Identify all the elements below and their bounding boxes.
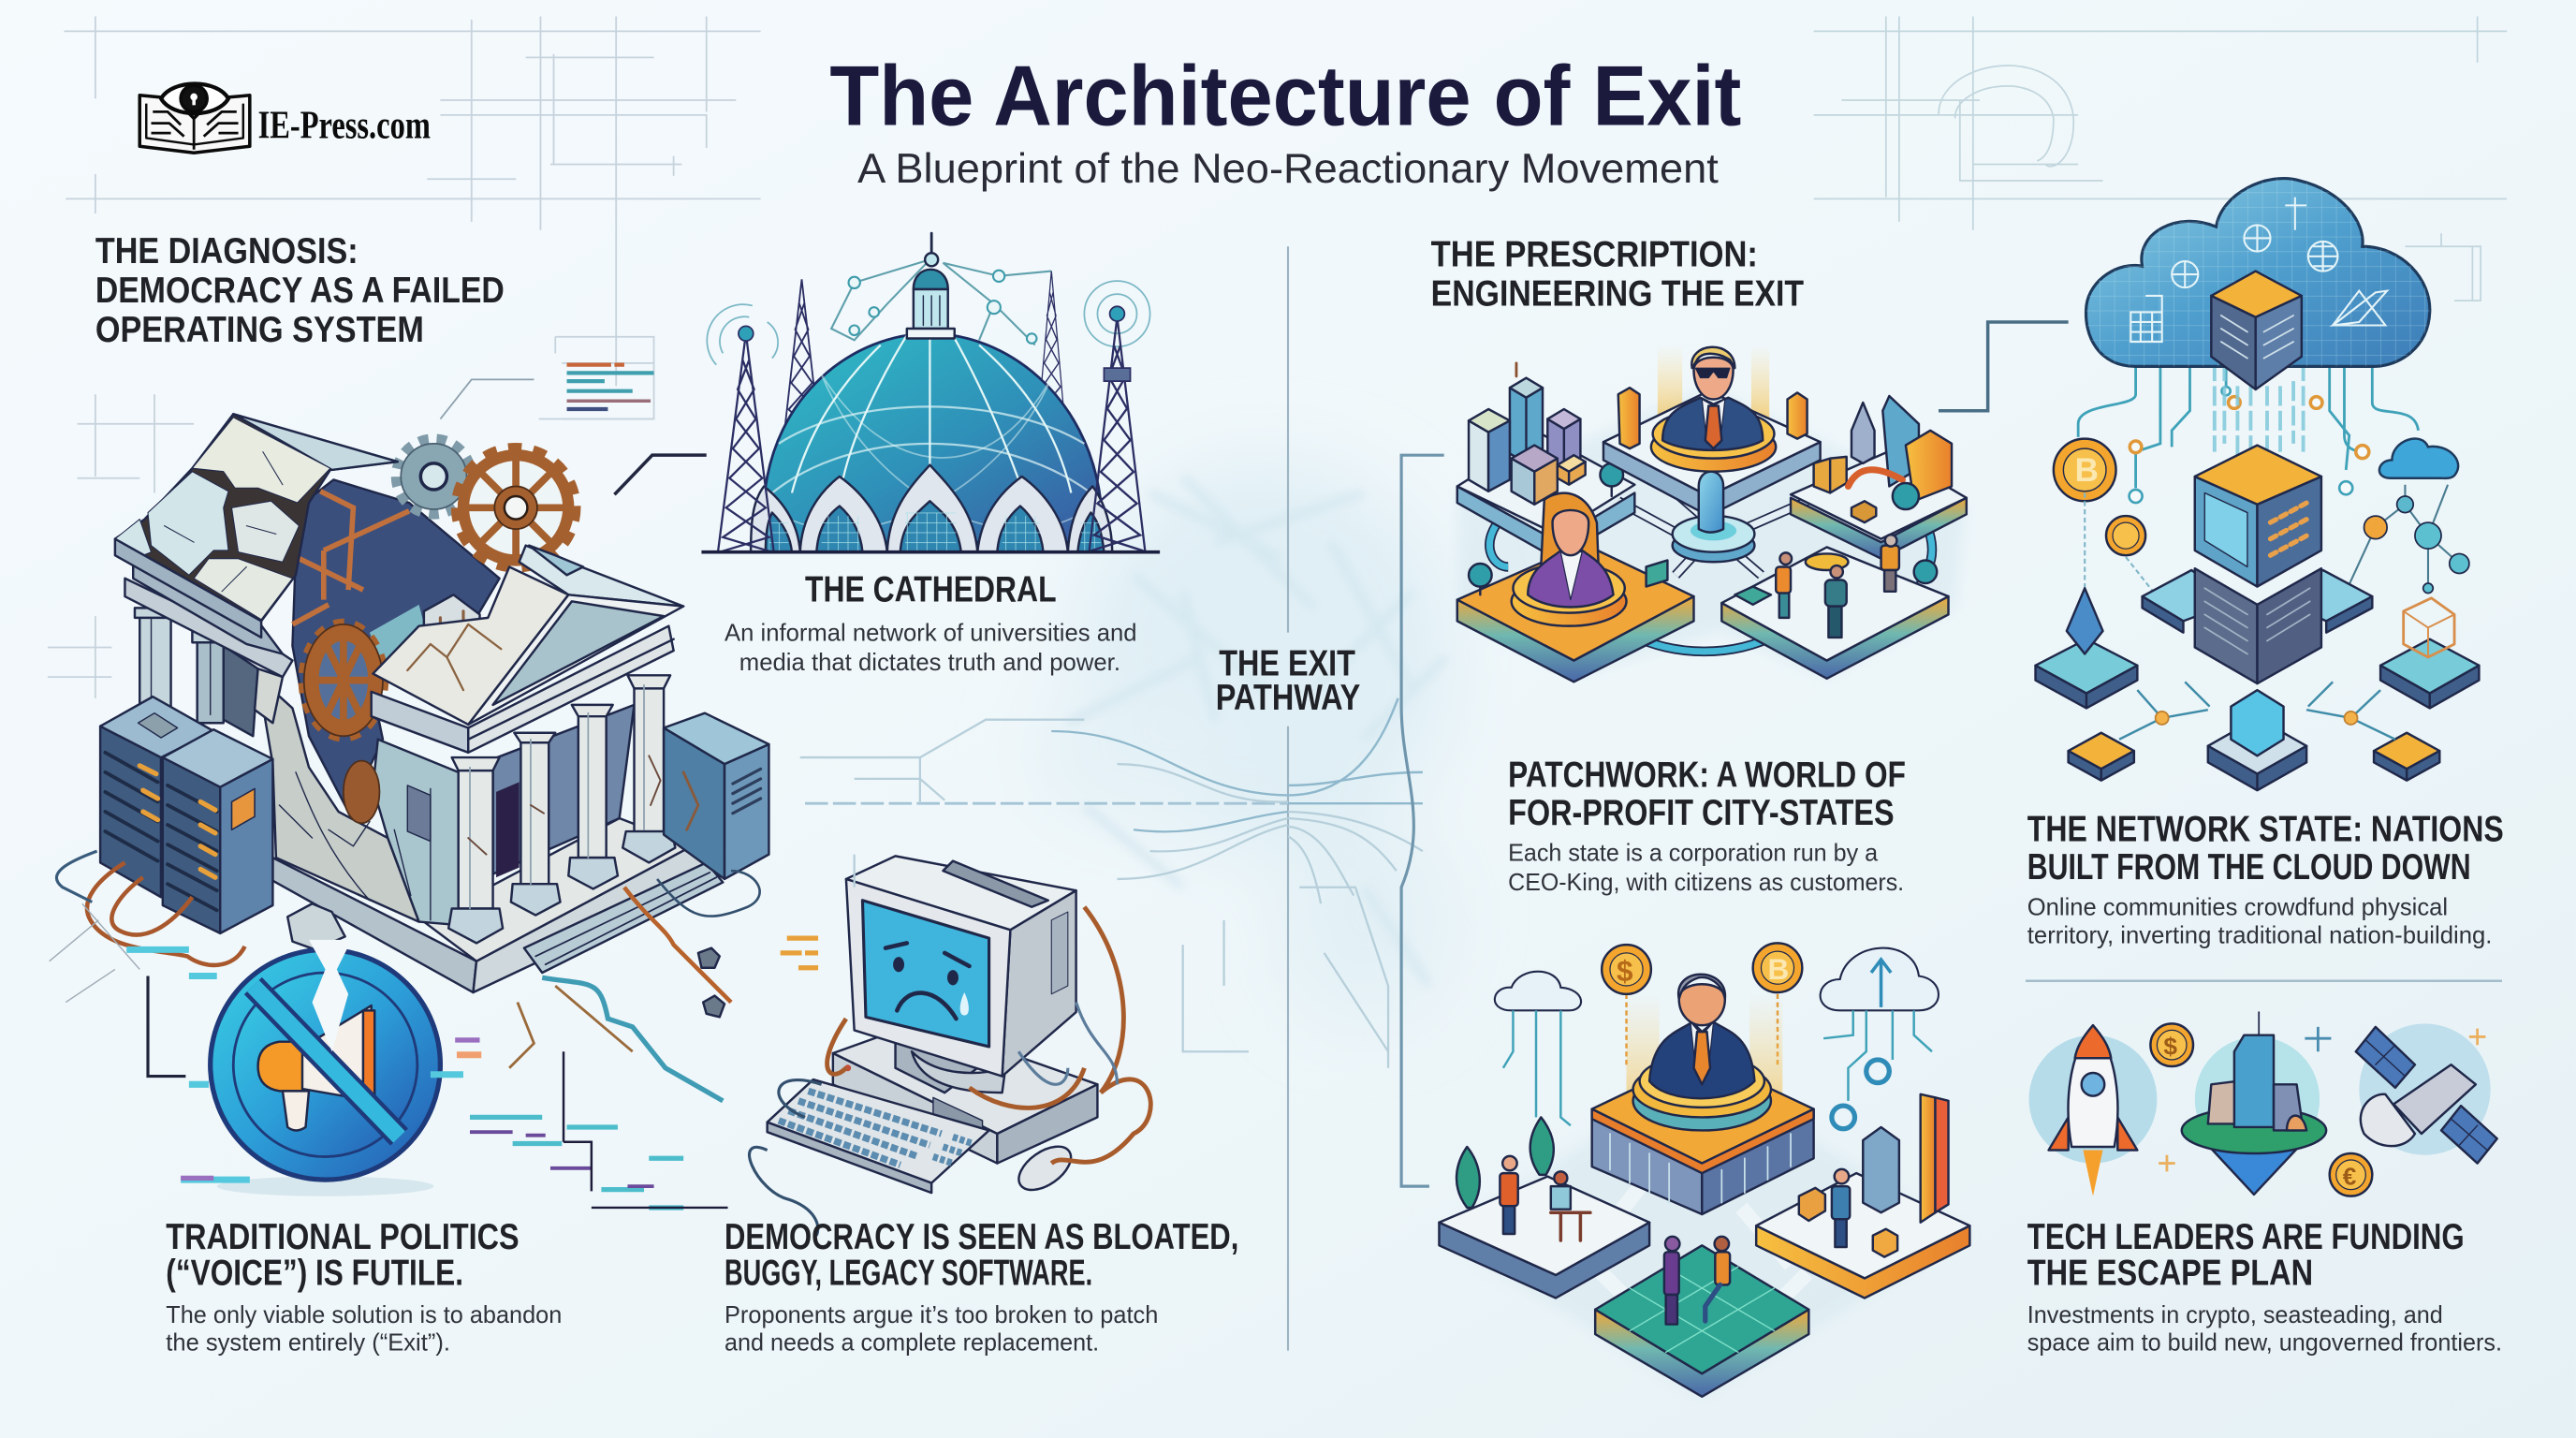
lower brown gears [304, 624, 383, 823]
centre spine [1287, 246, 1289, 1351]
illustration: patchwork city-states network [1457, 345, 1967, 682]
cables and debris [50, 851, 760, 1101]
mouse [1011, 1137, 1078, 1198]
icon row: escape plan: $ [2163, 1033, 2177, 1061]
heading: the prescription [1431, 234, 1804, 314]
small blueprint code panel [440, 363, 654, 419]
circuit traces [1503, 994, 1932, 1125]
heading: the diagnosis [95, 231, 505, 350]
blueprint lines: top right [1814, 17, 2507, 301]
tangled cables [750, 907, 1150, 1236]
citizens platform [1721, 535, 1949, 679]
monitor [846, 856, 1076, 1093]
subtitle: A Blueprint of the Neo-Reactionary Movement [857, 145, 1719, 192]
title: The Architecture of Exit [829, 48, 1741, 143]
icon: book and eye [139, 84, 250, 153]
grey gear [396, 439, 472, 514]
ethereum diamond and small platforms [2036, 588, 2479, 790]
icon row: escape plan [2029, 1012, 2497, 1196]
interior pipes [292, 492, 409, 624]
satellite icon [2356, 1023, 2497, 1164]
CEO figure [1662, 398, 1763, 450]
text: the network state: BUILT FROM THE CLOUD DOWN [2027, 847, 2471, 888]
text: tech leaders: THE ESCAPE PLAN [2027, 1253, 2313, 1293]
exit pathway label [1216, 643, 1360, 718]
female CEO platform [1457, 493, 1693, 682]
buildings [1510, 388, 1543, 463]
text: the cathedral: media that dictates truth and power. [739, 650, 1120, 676]
cracked side walls [224, 646, 459, 925]
right city platform [1791, 396, 1967, 559]
blueprint lines: top left [48, 17, 761, 698]
right platform [1756, 1094, 1969, 1298]
megaphone [258, 1005, 374, 1130]
heading: the prescription: ENGINEERING THE EXIT [1431, 273, 1804, 314]
illustration: network state cloud and tower: B [2075, 452, 2099, 489]
cyan links [1489, 516, 1932, 652]
text: traditional politics: the system entirely (“Exit”). [166, 1330, 450, 1357]
network over cathedral [831, 259, 1051, 345]
central building [1592, 975, 1814, 1214]
text: tech leaders: space aim to build new, ungoverned frontiers. [2027, 1330, 2502, 1357]
rocket icon [2029, 1025, 2157, 1196]
shadow [1457, 386, 1967, 677]
text: the network state [2027, 810, 2504, 948]
text: democracy is bloated: and needs a complete replacement. [724, 1330, 1099, 1357]
ground line [701, 551, 1160, 553]
glow beams [1627, 994, 1782, 1093]
text: patchwork: FOR-PROFIT CITY-STATES [1508, 793, 1895, 833]
executive figure [1649, 1022, 1754, 1098]
sparkles [2305, 1027, 2331, 1051]
connector: pathway to patchwork and cathedral side [1401, 455, 1444, 1186]
text: patchwork: Each state is a corporation run by a [1508, 841, 1879, 867]
bottom traces [2119, 682, 2395, 740]
gothic arches [751, 465, 1112, 552]
node graph [2346, 485, 2469, 594]
cloud glyphs [2130, 198, 2387, 342]
heading: the diagnosis: DEMOCRACY AS A FAILED [95, 271, 505, 311]
connector: temple to cathedral [614, 455, 707, 494]
keyboard [768, 1079, 989, 1193]
crack [309, 940, 352, 1051]
text: democracy is bloated: DEMOCRACY IS SEEN AS BLOATED, [724, 1217, 1238, 1257]
connecting bridges [1618, 493, 1808, 575]
top platform with CEO [1603, 345, 1821, 516]
exit pathway label: PATHWAY [1216, 678, 1360, 718]
side platforms [2143, 570, 2372, 633]
text: the network state: territory, inverting traditional nation-building. [2027, 922, 2492, 948]
text: democracy is bloated [724, 1217, 1238, 1357]
coins [1602, 943, 1802, 994]
left columns [135, 608, 283, 723]
shadow [1439, 1068, 1969, 1400]
text: democracy is bloated: Proponents argue it’s too broken to patch [724, 1302, 1158, 1328]
hub [1673, 472, 1754, 562]
left platform [1439, 1117, 1649, 1298]
signal rings [707, 281, 1150, 365]
dome [764, 333, 1101, 542]
mini cloud [2379, 439, 2458, 478]
computer case [833, 1022, 1097, 1164]
doorway [496, 782, 520, 877]
illustration: crumbling temple with servers [50, 414, 768, 1101]
prohibition slash [253, 986, 400, 1137]
exit pathway label: THE EXIT [1219, 643, 1355, 683]
logo [139, 84, 431, 153]
main tower [2195, 446, 2321, 683]
text: the cathedral: An informal network of universities and [724, 620, 1137, 646]
heading: the diagnosis: THE DIAGNOSIS: [95, 231, 359, 271]
server rack 2 [163, 729, 272, 933]
city island icon [2182, 1012, 2326, 1195]
sad face [886, 943, 970, 1019]
text: patchwork [1508, 756, 1906, 896]
left city platform [1457, 363, 1634, 559]
text: traditional politics: (“VOICE”) IS FUTILE. [166, 1253, 463, 1293]
illustration: corporate campus isometric: $ [1617, 954, 1633, 988]
text: the cathedral: THE CATHEDRAL [805, 569, 1057, 609]
text: democracy is bloated: BUGGY, LEGACY SOFTWARE. [724, 1253, 1092, 1293]
server rack right [664, 713, 768, 879]
illustration: network state cloud and tower [2036, 179, 2479, 790]
illustration: corporate campus isometric [1439, 943, 1969, 1400]
small clouds [1495, 972, 1581, 1010]
text: traditional politics [166, 1217, 562, 1357]
text: tech leaders [2027, 1217, 2502, 1357]
text: tech leaders: Investments in crypto, seasteading, and [2027, 1302, 2443, 1328]
illustration: sad legacy computer [750, 856, 1150, 1236]
decorative glitch dashes [126, 949, 728, 1208]
temple interior [292, 479, 500, 812]
connector: temple to banned voice [148, 976, 185, 1077]
broken left roof [115, 414, 398, 677]
heading: the diagnosis: OPERATING SYSTEM [95, 310, 424, 350]
illustration: cathedral dome with towers [701, 233, 1160, 552]
back towers [780, 279, 824, 476]
bottom platform [1595, 1237, 1808, 1397]
text: patchwork: PATCHWORK: A WORLD OF [1508, 756, 1906, 796]
dome ribs [772, 333, 1090, 529]
circuit traces [2078, 366, 2418, 488]
lantern [907, 233, 955, 339]
rear wall behind columns [493, 705, 634, 874]
temple base [272, 818, 731, 992]
text: the cathedral [724, 569, 1137, 676]
currency coins [2150, 1023, 2372, 1196]
exit pathway circuit lines [800, 698, 1423, 1068]
front columns [448, 675, 675, 943]
connector: patchwork to network state [1939, 322, 2069, 411]
icon: banned megaphone [211, 940, 440, 1196]
text: patchwork: CEO-King, with citizens as customers. [1508, 870, 1904, 896]
server rack 1 [100, 697, 213, 897]
coins [2054, 439, 2145, 555]
cloud [2086, 179, 2430, 366]
central watermark texture [1035, 460, 1454, 1019]
icon row: escape plan: € [2343, 1162, 2357, 1190]
text: the network state: Online communities crowdfund physical [2027, 895, 2448, 921]
broken right roof and pediment [372, 546, 683, 753]
illustration: corporate campus isometric: B [1767, 952, 1789, 986]
cloud server cube [2211, 271, 2302, 389]
bridges [1597, 1183, 1808, 1298]
antenna towers [718, 333, 774, 552]
data beams [2215, 361, 2304, 460]
text: traditional politics: TRADITIONAL POLITICS [166, 1217, 520, 1257]
text: tech leaders: TECH LEADERS ARE FUNDING [2027, 1217, 2465, 1257]
glitch marks [781, 938, 818, 968]
heading: the prescription: THE PRESCRIPTION: [1431, 234, 1758, 274]
logo wordmark: IE-Press.com [258, 103, 431, 147]
text: traditional politics: The only viable solution is to abandon [166, 1302, 562, 1328]
big brown gear [457, 448, 575, 566]
